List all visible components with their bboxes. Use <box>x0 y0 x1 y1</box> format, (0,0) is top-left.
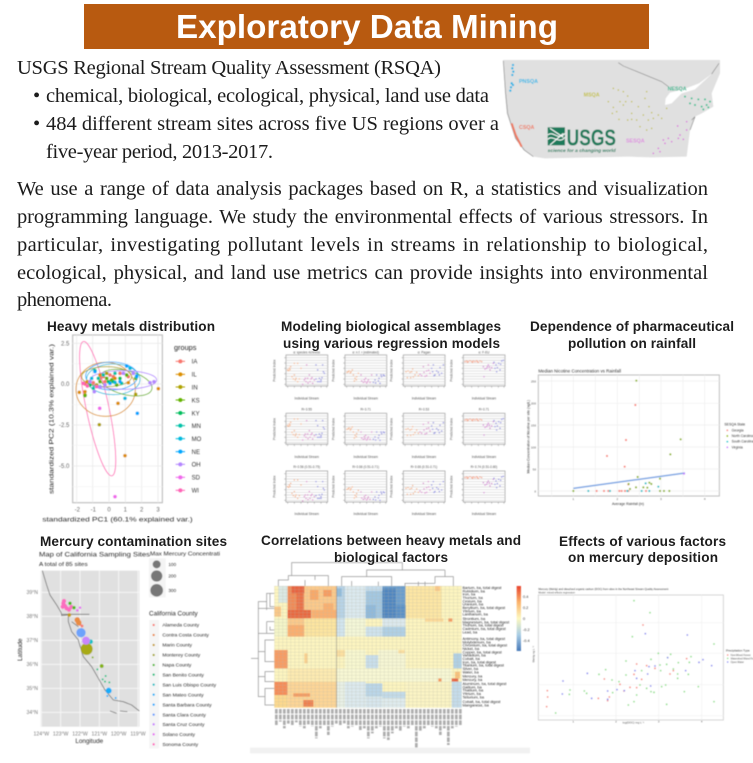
California sampling map: 37°N <box>26 638 38 644</box>
heatmap with dendrograms and labels: Nickel, ba <box>462 647 480 651</box>
PCA biplot: -5.0 <box>59 464 70 470</box>
nicotine scatter plot: 4 <box>704 497 706 501</box>
California sampling map: Alameda County <box>162 623 200 629</box>
California sampling map: Contra Costa County <box>162 633 209 639</box>
RSQA regional map with USGS logo: CSQA <box>519 125 535 131</box>
mercury vs DOC scatter plot: 4 <box>701 720 703 724</box>
small-multiple scatter plots: Individual Stream <box>353 397 378 401</box>
heading: effects <box>559 534 726 565</box>
small-multiple scatter plots: Predicted Index <box>450 359 454 382</box>
heatmap with dendrograms and labels: Lead, ba <box>462 630 478 634</box>
mercury vs DOC scatter plot: 1 <box>573 720 575 724</box>
RSQA regional map with USGS logo: USGS <box>567 124 616 150</box>
heatmap with dendrograms and labels: Yttrium, ba <box>462 609 482 613</box>
PCA biplot: KS <box>192 398 200 404</box>
heatmap with dendrograms and labels: Copper, ba, total digest <box>462 650 503 654</box>
nicotine scatter plot: 50 <box>533 467 536 471</box>
intro: RSQA bullet list: 484 different stream sites across five US regions over a <box>46 113 499 135</box>
small-multiple scatter plots: Individual Stream <box>472 455 497 459</box>
small-multiple scatter plots: Predicted Index <box>272 359 276 382</box>
heatmap with dendrograms and labels: Vanadium, ba <box>462 654 487 658</box>
small-multiple scatter plots: Individual Stream <box>472 512 497 516</box>
heatmap with dendrograms and labels: Cobalt, ba, total digest <box>462 700 501 704</box>
heatmap with dendrograms and labels: Lanthanum, ba <box>462 613 489 617</box>
heatmap with dendrograms and labels: Gallium, ba <box>462 685 483 689</box>
PCA biplot: groups <box>174 343 197 352</box>
small-multiple scatter plots: R² 0.66 (0.51-0.71) <box>352 465 379 469</box>
California sampling map: 124°W <box>34 732 49 738</box>
California sampling map: 300 <box>168 588 177 593</box>
heatmap with dendrograms and labels: Titanium, ba, total digest <box>462 664 505 668</box>
PCA biplot: IA <box>192 360 197 366</box>
heatmap with dendrograms and labels: Antimony, ba, total digest <box>462 637 506 641</box>
nicotine scatter plot: 1 <box>572 497 574 501</box>
California sampling map: Map of California Sampling Sites <box>39 551 151 558</box>
California sampling map: Latitude <box>17 638 24 661</box>
intro paragraph: particular, investigating pollutant levels in streams in relationship to biological, <box>17 234 708 256</box>
small-multiple scatter plots: Predicted Index <box>272 418 276 440</box>
PCA biplot: 2.5 <box>61 341 70 347</box>
mercury vs DOC scatter plot: Open Water <box>731 661 744 664</box>
intro paragraph <box>17 178 708 311</box>
PCA biplot: OH <box>192 463 201 469</box>
California sampling map: Solano County <box>162 732 196 738</box>
California sampling map: 35°N <box>26 686 38 692</box>
California sampling map: 120°W <box>111 732 127 738</box>
heading: effects: Effects of various factors <box>559 534 726 549</box>
panel: heavy metals distribution <box>42 319 215 524</box>
heading: correlations <box>261 533 521 565</box>
panel: pharmaceutical pollution vs rainfall <box>526 319 753 506</box>
heatmap with dendrograms and labels: Rubidium, ba <box>462 589 486 593</box>
small-multiple scatter plots: Individual Stream <box>412 512 437 516</box>
PCA biplot: SD <box>192 476 201 482</box>
heatmap with dendrograms and labels: Manganese, ba <box>462 703 490 707</box>
California sampling map: 38°N <box>26 614 38 620</box>
California sampling map: 122°W <box>72 732 88 738</box>
mercury vs DOC scatter plot: Non-Mixed Forest <box>731 654 751 657</box>
intro paragraph: ecological, physical, and land use metrics can provide insights into environmental <box>17 262 708 284</box>
heading: dependence: Dependence of pharmaceutical <box>530 319 734 334</box>
RSQA regional map with USGS logo: MSQA <box>584 93 600 99</box>
heatmap with dendrograms and labels: Thallium, ba <box>462 689 484 693</box>
California sampling map: Sonoma County <box>162 742 199 748</box>
small-multiple scatter plots: Individual Stream <box>472 397 497 401</box>
California sampling map: Max Mercury Concentrati <box>150 552 220 558</box>
heatmap with dendrograms and labels: -0.2 <box>523 628 530 632</box>
PCA biplot: -1 <box>91 507 97 513</box>
small-multiple scatter plots: Predicted Index <box>331 418 335 440</box>
heatmap with dendrograms and labels: Cesium, ba <box>462 599 483 603</box>
California sampling map: San Mateo County <box>162 692 204 698</box>
nicotine scatter plot: Virginia <box>732 445 743 449</box>
small-multiple scatter plots: R² 0.74 (0.51-0.80) <box>471 465 497 469</box>
small-multiple scatter plots: R² 0.55 <box>301 407 312 411</box>
heatmap with dendrograms and labels: Beryllium, ba, total digest <box>462 606 506 610</box>
nicotine scatter plot: Median Nicotine Concentration vs Rainfall <box>538 369 621 374</box>
heatmap with dendrograms and labels: 0.4 <box>523 595 529 599</box>
heading: correlations: biological factors <box>334 550 448 565</box>
mercury vs DOC scatter plot: MeHg ng L⁻¹ <box>531 646 535 662</box>
heading: dependence: pollution on rainfall <box>568 336 696 351</box>
heading: correlations: Correlations between heavy metals and <box>261 533 521 548</box>
title banner: Exploratory Data Mining <box>176 8 558 45</box>
California sampling map: 121°W <box>92 732 107 738</box>
PCA biplot: 3 <box>156 507 160 513</box>
small-multiple scatter plots: α: Pagan <box>418 350 431 354</box>
California sampling map: 123°W <box>53 732 69 738</box>
intro: RSQA bullet list: five-year period, 2013-2017. <box>46 141 273 163</box>
heatmap with dendrograms and labels: Thorium, ba, total digest <box>462 624 504 628</box>
panel: heavy metal correlations heatmap <box>250 533 530 753</box>
PCA biplot: NE <box>192 450 200 456</box>
RSQA regional map with USGS logo: PNSQA <box>519 79 538 85</box>
nicotine scatter plot <box>526 369 753 506</box>
intro paragraph: programming language. We study the environmental effects of various stressors. In <box>17 206 708 228</box>
small-multiple scatter plots: R² 0.71 <box>360 407 371 411</box>
California sampling map: Santa Clara County <box>162 712 206 718</box>
California sampling map: 36°N <box>26 662 38 668</box>
small-multiple scatter plots: R² 0.71 <box>479 407 489 411</box>
California sampling map: Monterey County <box>162 653 201 659</box>
heatmap with dendrograms and labels: Strontium, ba <box>462 617 486 621</box>
title banner <box>84 4 649 49</box>
mercury vs DOC scatter plot: Model: mixed-effects regression <box>538 591 575 595</box>
nicotine scatter plot: 250 <box>531 379 536 383</box>
small-multiple scatter plots <box>272 350 505 516</box>
mercury vs DOC scatter plot: log(DOC) mg L⁻¹ <box>623 721 644 725</box>
small-multiple scatter plots: Predicted Index <box>390 359 394 382</box>
PCA biplot: IN <box>192 385 198 391</box>
California sampling map: 34°N <box>26 710 38 716</box>
intro: RSQA bullet list: • <box>33 85 40 107</box>
heatmap with dendrograms and labels: Mercury, ba <box>462 675 483 679</box>
California sampling map: 119°W <box>130 732 146 738</box>
PCA biplot: MN <box>192 424 201 430</box>
California sampling map: 200 <box>168 574 177 579</box>
small-multiple scatter plots: Individual Stream <box>412 397 437 401</box>
PCA biplot: standardized PC1 (60.1% explained var.) <box>42 517 193 524</box>
PCA biplot: 1 <box>124 507 128 513</box>
mercury vs DOC scatter plot: Precipitation Type <box>726 649 750 653</box>
RSQA regional map with USGS logo: science for a changing world <box>548 148 617 154</box>
mercury vs DOC scatter plot: 3 <box>658 720 660 724</box>
heading: heavy metals: Heavy metals distribution <box>47 319 215 334</box>
heatmap with dendrograms and labels: Barium, ba, total digest <box>462 586 502 590</box>
heatmap with dendrograms and labels: Aluminum, ba, total digest <box>462 682 507 686</box>
California sampling map <box>17 551 220 748</box>
small-multiple scatter plots: Predicted Index <box>450 418 454 440</box>
RSQA regional map with USGS logo <box>503 60 720 158</box>
small-multiple scatter plots: α: n.f. r (estimated) <box>352 350 379 354</box>
small-multiple scatter plots: Predicted Index <box>331 359 335 382</box>
heatmap with dendrograms and labels: -0.4 <box>523 639 530 643</box>
PCA biplot: standardized PC2 (10.3% explained var.) <box>49 344 56 494</box>
intro: RSQA bullet list <box>17 57 499 163</box>
small-multiple scatter plots: Predicted Index <box>272 475 276 498</box>
PCA biplot: MO <box>192 437 202 443</box>
heading: modeling: using various regression models <box>283 336 500 351</box>
intro: RSQA bullet list: • <box>33 113 40 135</box>
California sampling map: Santa Barbara County <box>162 702 212 708</box>
PCA biplot: -2 <box>75 507 81 513</box>
heatmap with dendrograms and labels: Tellurium, ba <box>462 695 485 699</box>
heading: effects: on mercury deposition <box>568 550 718 565</box>
PCA biplot: IL <box>192 373 197 379</box>
small-multiple scatter plots: Individual Stream <box>294 397 319 401</box>
small-multiple scatter plots: R² 0.56 (0.51-0.75) <box>293 465 320 469</box>
small-multiple scatter plots: Individual Stream <box>353 455 378 459</box>
California sampling map: Santa Cruz County <box>162 722 205 728</box>
heading: modeling: Modeling biological assemblages <box>281 319 501 334</box>
California sampling map: San Benito County <box>162 672 204 678</box>
panel: mercury contamination sites <box>17 534 227 748</box>
heatmap with dendrograms and labels: Thorium, ba <box>462 596 484 600</box>
small-multiple scatter plots: α: F-EU <box>479 350 490 354</box>
RSQA regional map with USGS logo: SESQA <box>626 139 645 145</box>
small-multiple scatter plots: α: species richness <box>293 350 321 354</box>
California sampling map: San Luis Obispo County <box>162 682 217 688</box>
panel: effects on mercury deposition <box>531 534 753 725</box>
heatmap with dendrograms and labels: Cobalt, ba <box>462 657 481 661</box>
nicotine scatter plot: 200 <box>531 402 536 406</box>
small-multiple scatter plots: Individual Stream <box>294 512 319 516</box>
small-multiple scatter plots: Individual Stream <box>412 455 437 459</box>
mercury vs DOC scatter plot: Mercury (MeHg) and dissolved organic carbon (DOC) from sites in the Northeast Stream Quality Assessment <box>538 587 669 591</box>
heading: modeling <box>281 319 501 351</box>
California sampling map: 100 <box>168 562 177 567</box>
small-multiple scatter plots: R² 0.53 <box>419 407 429 411</box>
small-multiple scatter plots: Individual Stream <box>294 455 319 459</box>
heatmap with dendrograms and labels <box>250 563 530 753</box>
heatmap with dendrograms and labels: Iron, ba, total digest <box>462 660 497 664</box>
nicotine scatter plot: Median Concentration of Nicotine per site (ng/L) <box>526 400 530 473</box>
small-multiple scatter plots: Predicted Index <box>450 475 454 498</box>
small-multiple scatter plots: Predicted Index <box>390 418 394 440</box>
nicotine scatter plot: Georgia <box>732 428 744 432</box>
PCA biplot: 0 <box>107 507 111 513</box>
nicotine scatter plot: 100 <box>531 445 536 449</box>
heatmap with dendrograms and labels: Molybdenum, ba <box>462 640 492 644</box>
intro paragraph: We use a range of data analysis packages based on R, a statistics and visualization <box>17 178 708 200</box>
nicotine scatter plot: 150 <box>531 423 536 427</box>
PCA biplot: -2.5 <box>59 423 70 429</box>
California sampling map: Marin County <box>162 643 192 649</box>
California sampling map: Longitude <box>75 738 104 745</box>
nicotine scatter plot: 0 <box>534 489 536 493</box>
intro paragraph: phenomena. <box>17 289 112 311</box>
heatmap with dendrograms and labels: Uranium, ba <box>462 603 484 607</box>
California sampling map: 39°N <box>26 590 38 596</box>
heatmap with dendrograms and labels: 0 <box>523 617 525 621</box>
heatmap with dendrograms and labels: Mercury, ba <box>462 678 483 682</box>
small-multiple scatter plots: R² 0.66 (0.51-0.71) <box>411 465 437 469</box>
heatmap with dendrograms and labels: Iron, ba <box>462 593 476 597</box>
RSQA regional map with USGS logo: NESQA <box>668 87 687 93</box>
heatmap with dendrograms and labels: Silver, ba <box>462 667 479 671</box>
heatmap with dendrograms and labels: Chromium, ba, total digest <box>462 644 508 648</box>
heatmap with dendrograms and labels: Magnesium, ba, total digest <box>462 620 510 624</box>
heading: dependence <box>530 319 734 351</box>
heatmap with dendrograms and labels: Water, ba <box>462 670 479 674</box>
nicotine scatter plot: SESQA State <box>724 422 745 426</box>
nicotine scatter plot: 2 <box>616 497 618 501</box>
small-multiple scatter plots: Individual Stream <box>353 512 378 516</box>
small-multiple scatter plots: Predicted Index <box>390 475 394 498</box>
PCA biplot: WI <box>192 489 199 495</box>
California sampling map: Napa County <box>162 663 192 669</box>
heatmap with dendrograms and labels: Cadmium, ba, total digest <box>462 627 507 631</box>
California sampling map: California County <box>149 612 198 618</box>
small-multiple scatter plots: Predicted Index <box>331 475 335 498</box>
heatmap with dendrograms and labels: Yttrium, ba <box>462 692 482 696</box>
nicotine scatter plot: North Carolina <box>732 434 753 438</box>
mercury vs DOC scatter plot <box>531 587 753 725</box>
intro: RSQA bullet list: USGS Regional Stream Quality Assessment (RSQA) <box>17 57 441 79</box>
heatmap with dendrograms and labels: 0.2 <box>523 606 528 610</box>
heading: mercury sites: Mercury contamination sites <box>40 534 227 549</box>
PCA biplot: 0.0 <box>61 382 70 388</box>
mercury vs DOC scatter plot: 2 <box>615 720 617 724</box>
nicotine scatter plot: 3 <box>660 497 662 501</box>
intro: RSQA bullet list: chemical, biological, ecological, physical, land use data <box>46 85 489 107</box>
California sampling map: A total of 85 sites <box>39 562 88 568</box>
PCA biplot: KY <box>192 411 200 417</box>
PCA biplot: 2 <box>140 507 144 513</box>
PCA biplot <box>42 335 202 524</box>
panel: biological assemblage regression models <box>272 319 505 516</box>
nicotine scatter plot: Average Rainfall (in) <box>612 502 644 506</box>
